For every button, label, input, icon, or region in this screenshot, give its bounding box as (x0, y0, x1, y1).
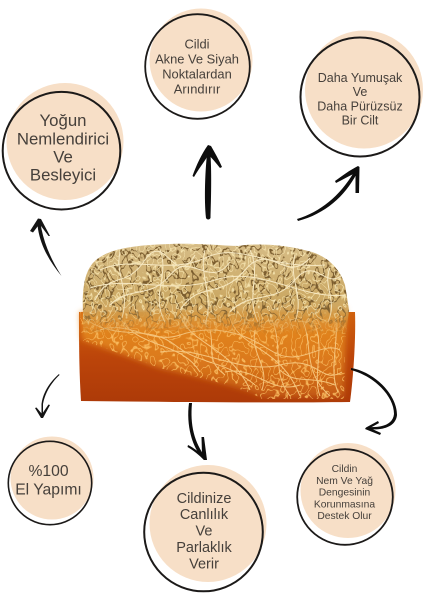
circle: Cildin Nem Ve Yağ Dengesinin Korunmasına Destek Olur: Dengesinin (319, 488, 371, 498)
circle: Yoğun Nemlendirici Ve Besleyici (3, 83, 124, 210)
arrow: to Cildi Akne (192, 145, 222, 220)
circle: Cildi Akne Ve Siyah Noktalardan Arındırır: Akne Ve Siyah (155, 52, 239, 66)
arrow: to Cildin Nem Ve Yağ (351, 368, 397, 435)
circle: Cildi Akne Ve Siyah Noktalardan Arındırır: Arındırır (174, 82, 221, 96)
arrow: to Yoğun Nemlendirici (30, 218, 62, 276)
circle: Cildi Akne Ve Siyah Noktalardan Arındırır: Cildi (184, 36, 210, 52)
arrow: to El Yapımı (35, 374, 60, 418)
circle: Cildi Akne Ve Siyah Noktalardan Arındırır: Noktalardan (162, 66, 232, 82)
circle: Daha Yumuşak Ve Daha Pürüzsüz Bir Cilt: Daha Pürüzsüz (317, 100, 403, 114)
loofah top (83, 244, 349, 335)
circle: Cildinize Canlılık Ve Parlaklık Verir: Canlılık (180, 507, 229, 523)
circle: %100 El Yapımı (8, 436, 93, 525)
circle: %100 El Yapımı: El Yapımı (15, 482, 82, 498)
circle: Yoğun Nemlendirici Ve Besleyici: Nemlendirici (17, 129, 109, 148)
loofah fibre texture (80, 240, 352, 337)
circle: Yoğun Nemlendirici Ve Besleyici: Ve (53, 148, 73, 166)
circle: %100 El Yapımı: %100 (28, 463, 69, 480)
circle: Cildi Akne Ve Siyah Noktalardan Arındırır (145, 8, 252, 119)
circle: Daha Yumuşak Ve Daha Pürüzsüz Bir Cilt: Daha Yumuşak (318, 71, 403, 85)
circle: Cildinize Canlılık Ve Parlaklık Verir (144, 465, 266, 591)
circle: Daha Yumuşak Ve Daha Pürüzsüz Bir Cilt: Ve (353, 85, 367, 99)
circle: Cildin Nem Ve Yağ Dengesinin Korunmasına Destek Olur: Destek Olur (317, 511, 372, 522)
circle: Cildin Nem Ve Yağ Dengesinin Korunmasına Destek Olur: Cildin (332, 464, 358, 475)
circle: Cildinize Canlılık Ve Parlaklık Verir: Verir (189, 556, 219, 572)
circle: Daha Yumuşak Ve Daha Pürüzsüz Bir Cilt: Bir Cilt (342, 114, 379, 128)
circle: Cildinize Canlılık Ve Parlaklık Verir: Cildinize (177, 491, 231, 507)
arrow: to Daha Yumuşak (297, 166, 360, 221)
circle: Cildin Nem Ve Yağ Dengesinin Korunmasına Destek Olur (297, 443, 396, 545)
circle: Yoğun Nemlendirici Ve Besleyici: Besleyici (30, 166, 96, 184)
arrow: to Cildinize Canlılık (188, 403, 207, 460)
embedded loofah, orange section (80, 308, 346, 397)
circle: Cildinize Canlılık Ve Parlaklık Verir: Ve (196, 524, 212, 540)
circle: Yoğun Nemlendirici Ve Besleyici: Yoğun (40, 111, 86, 130)
circle: Daha Yumuşak Ve Daha Pürüzsüz Bir Cilt (300, 30, 423, 156)
soap fibre texture (80, 312, 346, 399)
circle: Cildin Nem Ve Yağ Dengesinin Korunmasına Destek Olur: Korunmasına (314, 499, 375, 510)
soap base (79, 312, 355, 402)
circle: Cildinize Canlılık Ve Parlaklık Verir: Parlaklık (176, 540, 233, 556)
soap bar with loofah (78, 240, 355, 404)
circle: Cildin Nem Ve Yağ Dengesinin Korunmasına Destek Olur: Nem Ve Yağ (316, 476, 373, 487)
